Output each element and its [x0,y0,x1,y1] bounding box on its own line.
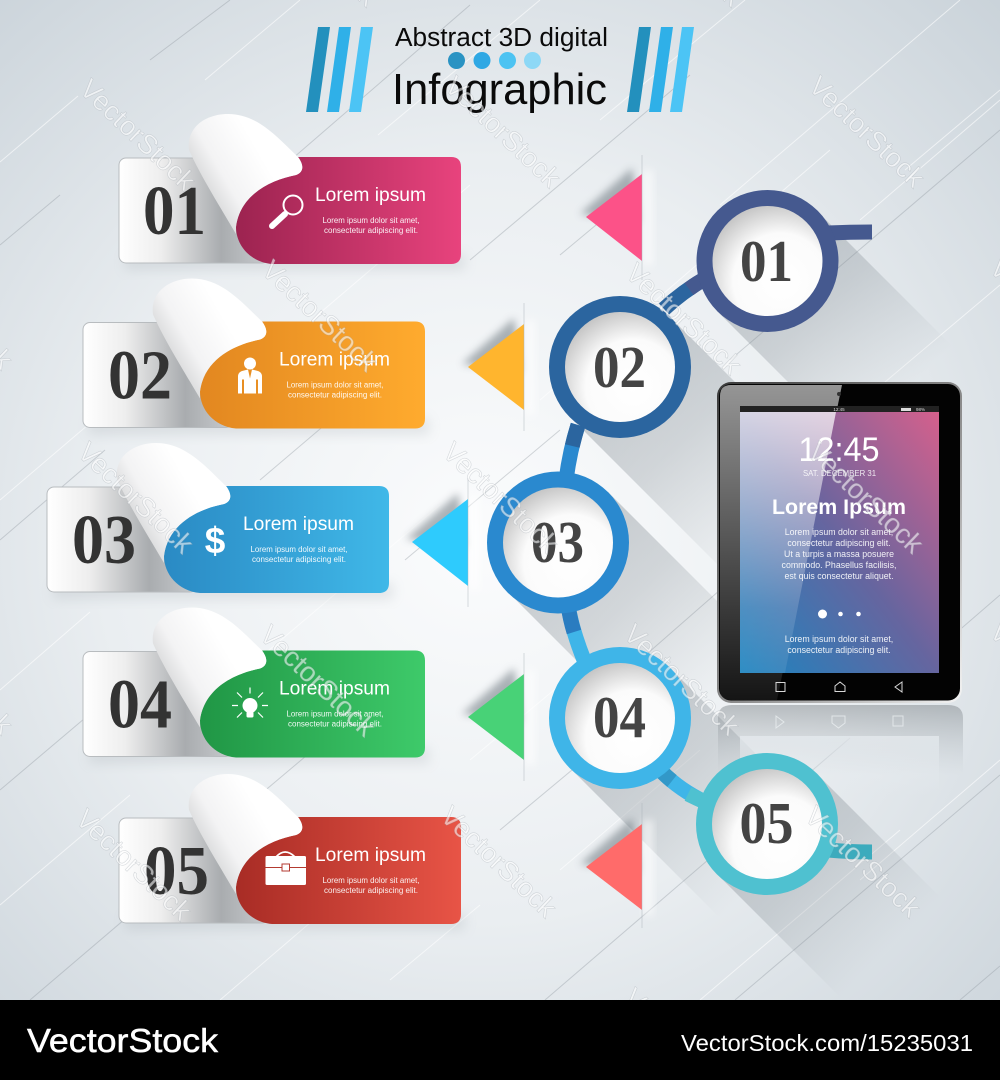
screen heading: Lorem Ipsum [772,496,906,519]
watermarks: VectorStock [618,618,746,742]
icon: magnifier [272,196,302,226]
number 01: 01 [143,173,206,250]
camera [837,392,841,396]
status bar: 98% [916,407,925,412]
number panel [119,158,269,263]
timeline ring 03 [487,472,629,614]
folded paper curl [153,278,266,398]
timeline ring 05 [696,753,838,895]
card 2 [83,278,429,434]
number panel [119,818,269,923]
screen body text: Ut a turpis a massa posuere [784,549,894,559]
timeline ring 02: 02 [593,334,646,400]
screen body text: est quis consectetur aliquet. [784,571,894,581]
icon: dollar: $ [205,520,226,561]
watermarks: VectorStock [437,436,565,560]
card shadow [125,914,465,930]
timeline ring 04 [549,647,691,789]
screen footer text: Lorem ipsum dolor sit amet, [785,634,893,644]
watermarks: VectorStock [439,70,567,194]
number panel [83,322,233,428]
triangle 1 [580,155,653,280]
decorative dots [448,52,541,69]
folded paper curl [117,443,230,563]
triangle 3 [406,478,479,607]
icon: businessman [238,358,262,394]
card shadow [89,748,429,764]
icon: light bulb [232,688,268,718]
screen [740,412,939,673]
timeline ring 03: 03 [531,509,584,575]
footer logo text: VectorStock [27,1022,219,1059]
label text: Lorem ipsum dolor sit amet, [250,545,348,554]
timeline ring 04: 04 [593,684,646,750]
watermarks: VectorStock [256,254,384,378]
label text: Lorem ipsum [315,185,426,206]
coloured label [236,817,461,924]
label text [315,185,426,235]
date: SAT. DECEMBER 31 [803,469,876,478]
coloured label [200,650,425,758]
screen footer text: consectetur adipiscing elit. [787,645,891,655]
watermarks: VectorStock [803,70,931,194]
card 1 [119,114,465,270]
watermarks: VectorStock [802,436,930,560]
navigation icons [776,682,902,692]
label text: consectetur adipiscing elit. [324,226,418,235]
number 02: 02 [108,338,172,414]
watermarks: VectorStock [620,257,748,381]
number panel [47,487,197,592]
screen body text [782,527,896,581]
card 3 [47,443,393,599]
label text [243,514,354,564]
label text [279,678,390,728]
connector: ring 01 tail [828,232,872,233]
label text: consectetur adipiscing elit. [288,390,382,400]
watermarks: VectorStock [70,803,198,927]
watermarks: VectorStock [72,436,200,560]
label text: Lorem ipsum dolor sit amet, [322,216,420,225]
card shadow [125,254,465,270]
heading: Abstract 3D digital: Abstract 3D digital [395,24,608,52]
status bar: 12:45 [833,407,845,412]
label text: Lorem ipsum [243,514,354,535]
label text: consectetur adipiscing elit. [252,555,346,564]
tablet body [717,382,962,703]
card 4 [83,608,429,764]
title block [306,24,694,114]
watermarks: VectorStock [254,619,382,743]
connector: ring 05 tail [828,850,872,852]
icon: briefcase [266,852,306,885]
label text: Lorem ipsum dolor sit amet, [286,380,384,390]
connector: ring 01 to 02 [664,278,706,309]
label text [315,845,426,895]
timeline ring 05: 05 [740,790,794,856]
footer bar [0,1000,1000,1080]
label text: consectetur adipiscing elit. [288,720,382,728]
timeline ring 01: 01 [740,228,793,294]
heading: Infographic: Infographic [392,65,607,114]
clock: 12:45 [798,431,880,469]
label text: Lorem ipsum dolor sit amet, [322,876,420,885]
number 03: 03 [72,502,136,579]
connector lines [566,232,872,852]
card shadow [53,583,393,599]
timeline ring 02 [549,296,691,438]
label text: Lorem ipsum dolor sit amet, [286,710,384,718]
arrow triangles [406,155,653,928]
coloured label [200,322,425,428]
footer url text: VectorStock.com/15235031 [681,1030,973,1056]
watermarks: VectorStock [74,73,202,197]
pager dots [818,610,861,618]
timeline ring 01 [696,190,838,332]
screen body text: commodo. Phasellus facilisis, [782,560,896,570]
connector: ring 03 to 04 [568,605,584,660]
triangle 2 [462,303,535,431]
tablet [717,382,963,796]
screen glare [740,412,836,673]
folded paper curl [189,774,302,894]
icon: right slashes [627,27,694,112]
watermarks: VectorStock [799,800,927,924]
label text: Lorem ipsum [279,678,390,700]
long shadows of timeline rings [508,211,957,1000]
watermarks: VectorStock [435,800,563,924]
triangle 5 [580,803,653,928]
number 04: 04 [108,666,172,744]
connector: ring 04 to 05 [662,772,705,802]
label text: Lorem ipsum [315,845,426,866]
status bar [740,406,939,412]
label text: Lorem ipsum [279,350,390,370]
card 5 [119,774,465,930]
number 05: 05 [144,833,209,910]
coloured label [164,486,389,593]
icon: left slashes [306,27,373,112]
label text [279,350,390,400]
triangle 4 [462,653,535,781]
connector: ring 02 to 03 [566,425,578,480]
screen body text: Lorem ipsum dolor sit amet, [785,527,893,537]
screen footer text [785,634,893,655]
number panel [83,652,233,756]
screen body text: consectetur adipiscing elit. [787,538,891,548]
bezel glare [720,385,842,700]
card shadow [89,418,429,434]
coloured label [236,157,461,264]
folded paper curl [153,608,266,728]
folded paper curl [189,114,302,234]
label text: consectetur adipiscing elit. [324,886,418,895]
tablet reflection [718,705,963,796]
